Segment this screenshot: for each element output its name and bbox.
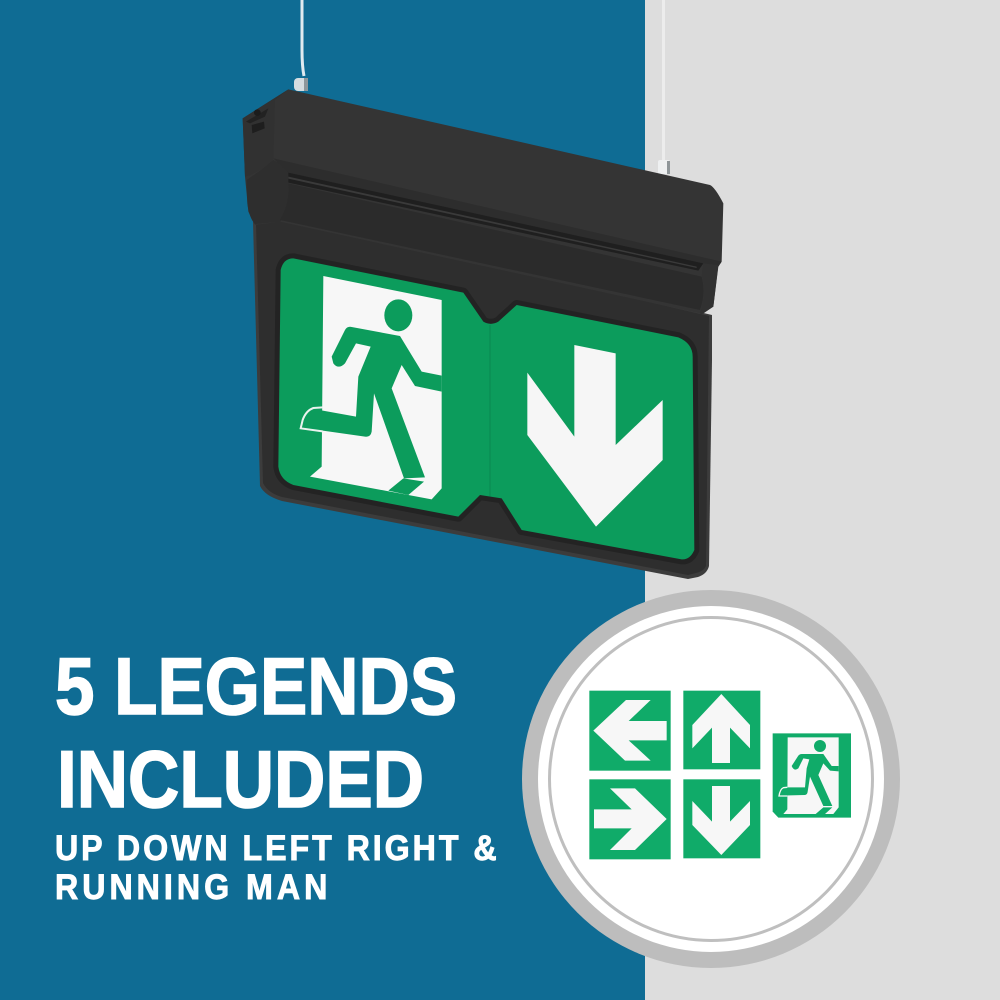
shoe outline [301, 407, 323, 431]
running man figure [302, 299, 442, 495]
subtitle line 1: UP DOWN LEFT RIGHT & [55, 830, 497, 868]
subtitle [55, 830, 497, 907]
icon: left arrow legend [589, 691, 671, 771]
roller [280, 183, 703, 310]
panel seam [489, 325, 491, 497]
right bracket [700, 263, 718, 314]
lip [273, 158, 722, 267]
panel: blue background [0, 0, 645, 1000]
icon: right arrow legend [589, 779, 671, 859]
title line 1: 5 LEGENDS [55, 642, 457, 732]
right suspension cable [658, 0, 670, 174]
left suspension cable [294, 0, 308, 91]
circle callout [522, 590, 900, 968]
sign lower housing [253, 216, 712, 579]
panel: grey background [645, 0, 1000, 1000]
title line 2: INCLUDED [57, 735, 424, 825]
subtitle line 2: RUNNING MAN [55, 869, 327, 907]
green legend plate [278, 258, 694, 559]
end cap [243, 89, 288, 177]
hinge knuckle [247, 160, 288, 224]
icon: up arrow legend [683, 691, 760, 769]
title [55, 642, 457, 825]
icon: down arrow legend [683, 779, 760, 858]
down arrow [527, 345, 663, 527]
groove [288, 173, 703, 271]
icon: running man legend [773, 733, 851, 818]
legend icons group [589, 691, 851, 859]
exit sign product [243, 89, 723, 579]
upper housing [243, 89, 723, 315]
white door [310, 276, 442, 499]
